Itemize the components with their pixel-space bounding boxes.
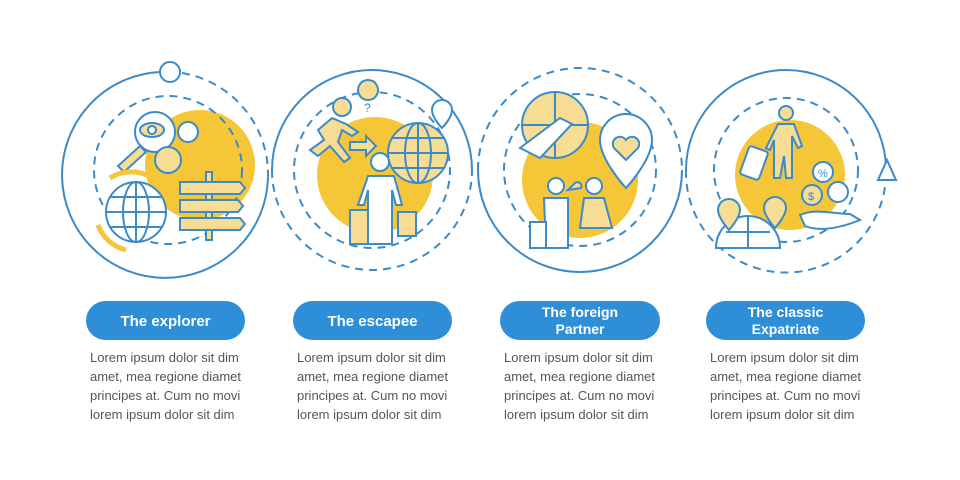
text: escapee: lorem ipsum dolor sit dim <box>297 407 442 422</box>
pill: The explorer <box>86 301 245 340</box>
text: classic expatriate: Lorem ipsum dolor sit dim <box>710 350 859 365</box>
icon: runner <box>310 80 378 162</box>
text: classic expatriate: amet, mea regione diamet <box>710 369 861 384</box>
pill: The foreign Partner <box>500 301 660 340</box>
text: foreign partner: principes at. Cum no movi <box>504 388 654 403</box>
text: classic expatriate: lorem ipsum dolor sit dim <box>710 407 854 422</box>
icon: globe with hand <box>520 92 588 158</box>
pill: The foreign Partner: The foreign <box>542 304 618 320</box>
pill: The escapee: The escapee <box>327 313 418 330</box>
icon: runner: ? <box>364 101 371 115</box>
icon: heart pin <box>600 114 652 188</box>
icon: magnifier eye <box>118 112 198 173</box>
icon: hand with coins: $ <box>808 191 814 203</box>
text: foreign partner <box>504 350 655 422</box>
text: explorer: lorem ipsum dolor sit dim <box>90 407 234 422</box>
text: explorer: Lorem ipsum dolor sit dim <box>90 350 239 365</box>
pill: The classic Expatriate: Expatriate <box>752 321 820 337</box>
panel: classic expatriate <box>686 70 896 273</box>
pill: The explorer: The explorer <box>120 313 211 330</box>
icon: couple <box>530 178 612 248</box>
text: foreign partner: Lorem ipsum dolor sit dim <box>504 350 653 365</box>
text: classic expatriate: principes at. Cum no movi <box>710 388 860 403</box>
icon: globe with pins <box>716 197 786 248</box>
text: foreign partner: lorem ipsum dolor sit dim <box>504 407 648 422</box>
text: foreign partner: amet, mea regione diamet <box>504 369 655 384</box>
icon: arrow <box>878 160 896 180</box>
pill: The escapee <box>293 301 452 340</box>
icon: traveller <box>350 153 416 244</box>
text: explorer <box>90 350 241 422</box>
panel: escapee <box>272 70 472 270</box>
text: explorer: principes at. Cum no movi <box>90 388 240 403</box>
pill: The foreign Partner: Partner <box>555 321 605 337</box>
icon: signpost <box>180 172 245 240</box>
panel: foreign partner <box>478 68 682 272</box>
icon: globe with pin <box>388 100 452 183</box>
text: explorer: amet, mea regione diamet <box>90 369 241 384</box>
text: escapee: Lorem ipsum dolor sit dim <box>297 350 446 365</box>
pill: The classic Expatriate <box>706 301 865 340</box>
text: escapee <box>297 350 448 422</box>
icon: walker with suitcase <box>739 106 802 181</box>
icon: hand with coins: % <box>818 168 828 180</box>
icon: hand with coins <box>800 162 860 229</box>
icon: globe <box>98 172 168 250</box>
panel: explorer <box>62 62 268 278</box>
text: classic expatriate <box>710 350 861 422</box>
text: escapee: amet, mea regione diamet <box>297 369 448 384</box>
text: escapee: principes at. Cum no movi <box>297 388 447 403</box>
pill: The classic Expatriate: The classic <box>748 304 823 320</box>
